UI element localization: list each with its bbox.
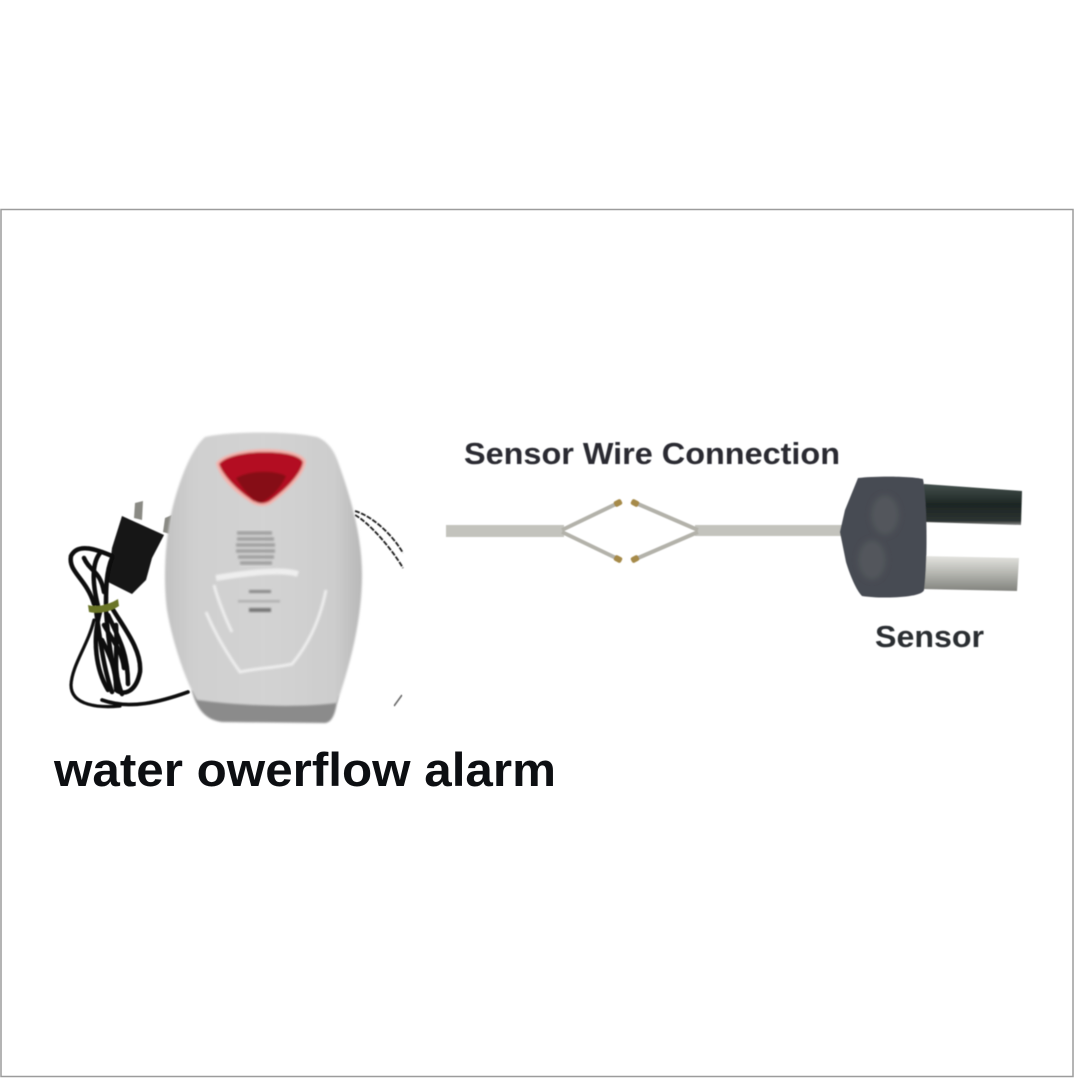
front label text marks <box>238 590 280 612</box>
sensor head mottling <box>858 495 899 580</box>
label: sensor wire connection: Sensor Wire Connection <box>464 436 840 471</box>
sensor head <box>840 477 927 598</box>
front label panel outline <box>206 571 326 672</box>
alarm body <box>165 432 362 706</box>
icon: alarm sensor output wires <box>355 511 403 568</box>
label: sensor: Sensor <box>875 619 984 654</box>
icon: water sensor probe <box>840 477 1022 598</box>
diagram: sensor wire connection <box>446 498 850 564</box>
wire joints <box>613 498 640 564</box>
coiled cord <box>71 548 188 707</box>
small speck <box>394 695 402 706</box>
bottom metal prong <box>922 556 1019 591</box>
plug prongs <box>134 501 172 534</box>
label: water overflow alarm: water owerflow alarm <box>53 743 556 796</box>
split wire branches <box>562 504 698 558</box>
plug body <box>108 516 164 594</box>
top metal prong <box>924 484 1022 525</box>
speaker grille <box>236 533 275 563</box>
right wire <box>695 525 850 536</box>
red alarm light <box>216 449 306 506</box>
icon: alarm power cord and plug <box>71 501 188 707</box>
panel: bordered frame <box>1 210 1073 1076</box>
cord band <box>88 599 119 613</box>
left wire <box>446 525 564 537</box>
alarm base <box>192 690 338 723</box>
icon: water overflow alarm unit <box>165 432 362 723</box>
